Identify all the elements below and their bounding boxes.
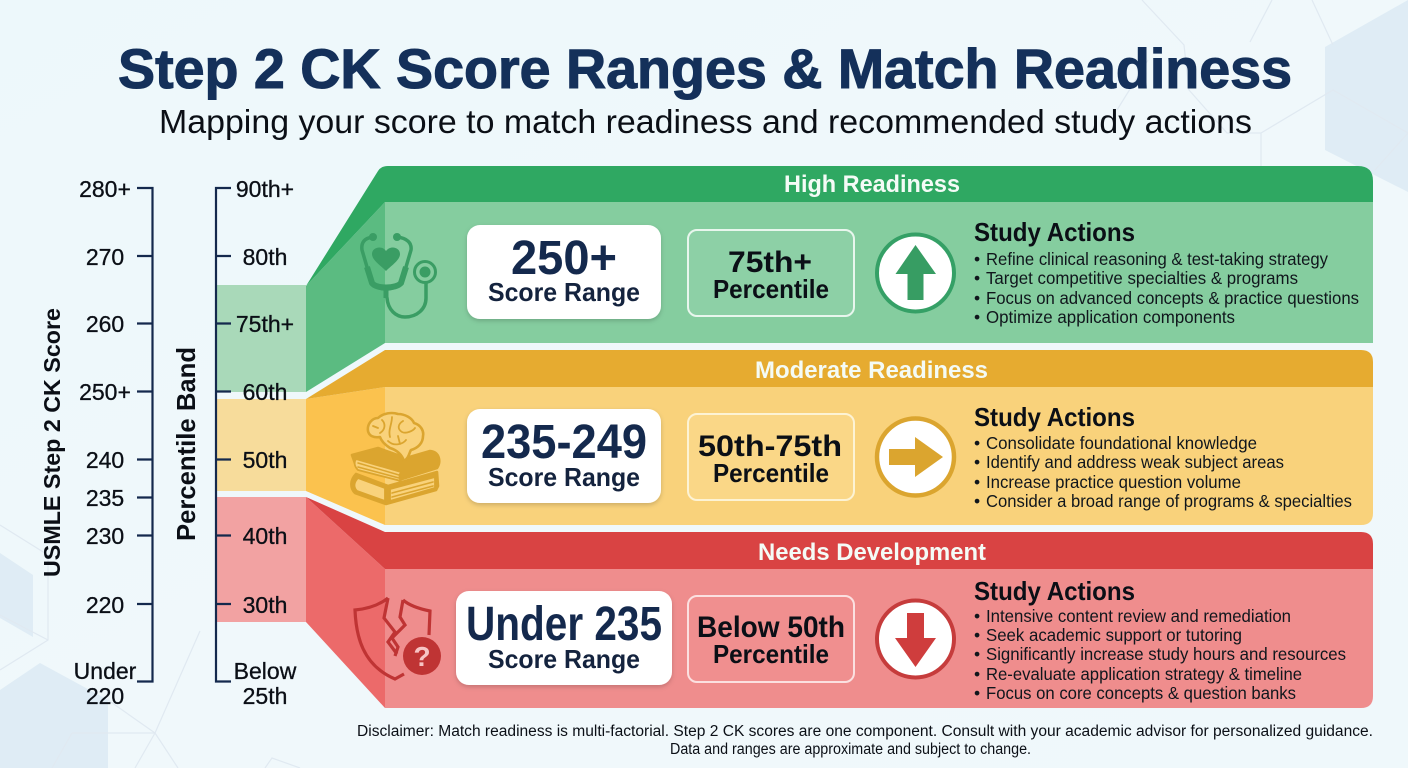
axis: USMLE Step 2 CK score: 235 xyxy=(86,485,124,511)
disclaimer: Disclaimer: Match readiness is multi-factorial. Step 2 CK scores are one component. Consult with your academic advisor for personalized guidance. xyxy=(357,723,1373,740)
percentile card: 75th+: 75th+ xyxy=(728,246,812,279)
panel: high readiness xyxy=(306,166,1373,392)
axis title: USMLE Step 2 CK Score: USMLE Step 2 CK Score xyxy=(39,308,65,577)
axis: USMLE Step 2 CK score: 240 xyxy=(86,447,124,473)
score card: Under 235: Under 235 xyxy=(466,598,662,651)
study actions: moderate readiness: Study Actions xyxy=(974,402,1135,432)
axis: USMLE Step 2 CK score: 260 xyxy=(86,311,124,337)
axis: USMLE Step 2 CK score xyxy=(74,176,152,709)
yellow side face xyxy=(306,387,385,525)
score card: 250+: Score Range xyxy=(488,277,640,307)
study actions: high readiness: Optimize application components xyxy=(986,307,1235,327)
study actions: high readiness xyxy=(974,217,1359,327)
study actions: moderate readiness: • xyxy=(974,472,980,492)
study actions: needs development xyxy=(974,576,1346,703)
percentile card: 50th-75th: 50th-75th xyxy=(698,430,842,463)
percentile card: 50th-75th xyxy=(688,414,854,500)
icon: down arrow xyxy=(877,600,954,678)
axis: USMLE Step 2 CK score: 220 xyxy=(86,592,124,618)
study actions: needs development: Focus on core concepts & question banks xyxy=(986,683,1296,703)
percentile card: 50th-75th: Percentile xyxy=(713,458,829,488)
green side face xyxy=(306,202,385,392)
score card: Under 235 xyxy=(456,591,672,685)
study actions: moderate readiness: Increase practice question volume xyxy=(986,472,1241,492)
red panel body xyxy=(385,569,1373,708)
study actions: moderate readiness: Identify and address weak subject areas xyxy=(986,452,1284,472)
study actions: moderate readiness: • xyxy=(974,452,980,472)
bottom book xyxy=(351,472,438,504)
axis: percentile: 50th xyxy=(243,447,287,473)
axis: percentile: 60th xyxy=(243,379,287,405)
panel: needs development xyxy=(306,497,1373,708)
axis: percentile: Below xyxy=(234,658,297,684)
axis: USMLE Step 2 CK score: 280+ xyxy=(79,176,131,202)
percentile band: needs development xyxy=(216,497,306,622)
red side face xyxy=(306,497,385,708)
axis: percentile: 80th xyxy=(243,244,287,270)
icon: right arrow xyxy=(877,418,954,496)
header: Needs Development: Needs Development xyxy=(758,539,986,566)
axis: percentile: 75th+ xyxy=(236,311,294,337)
study actions: moderate readiness: Consolidate foundational knowledge xyxy=(986,433,1257,453)
red header band xyxy=(306,497,1373,569)
study actions: moderate readiness: Consider a broad range of programs & specialties xyxy=(986,491,1352,511)
icon: up arrow xyxy=(877,234,954,312)
percentile band: moderate xyxy=(216,399,306,491)
score card: 235-249: Score Range xyxy=(488,462,640,492)
study actions: needs development: • xyxy=(974,606,980,626)
brain xyxy=(368,413,423,461)
axis: USMLE Step 2 CK score: 230 xyxy=(86,523,124,549)
axis: USMLE Step 2 CK score: Under xyxy=(74,658,137,684)
axis: percentile: 25th xyxy=(243,683,287,709)
score card: 235-249 xyxy=(467,409,661,503)
disclaimer xyxy=(357,723,1373,758)
study actions: moderate readiness: • xyxy=(974,491,980,511)
score card: Under 235: Score Range xyxy=(488,644,640,674)
study actions: high readiness: Study Actions xyxy=(974,217,1135,247)
study actions: needs development: • xyxy=(974,683,980,703)
score card: 250+ xyxy=(467,225,661,319)
axis: percentile xyxy=(216,176,297,709)
title: Step 2 CK Score Ranges & Match Readiness xyxy=(118,37,1292,100)
panel: moderate readiness xyxy=(306,350,1373,525)
yellow panel body xyxy=(385,387,1373,525)
study actions: needs development: • xyxy=(974,664,980,684)
axis: USMLE Step 2 CK score: 270 xyxy=(86,244,124,270)
study actions: high readiness: • xyxy=(974,268,980,288)
study actions: high readiness: • xyxy=(974,307,980,327)
percentile card: Below 50th: Percentile xyxy=(713,639,829,669)
study actions: high readiness: • xyxy=(974,249,980,269)
study actions: needs development: • xyxy=(974,625,980,645)
study actions: high readiness: Target competitive specialties & programs xyxy=(986,268,1298,288)
axis: USMLE Step 2 CK score: 220 xyxy=(86,683,124,709)
study actions: needs development: Re-evaluate application strategy & timeline xyxy=(986,664,1302,684)
percentile card: 75th+ xyxy=(688,230,854,316)
axis: percentile: 40th xyxy=(243,523,287,549)
study actions: needs development: Study Actions xyxy=(974,576,1135,606)
subtitle: Mapping your score to match readiness and recommended study actions xyxy=(159,103,1252,140)
score card: 235-249: 235-249 xyxy=(481,416,647,469)
study actions: needs development: Significantly increase study hours and resources xyxy=(986,644,1346,664)
study actions: needs development: • xyxy=(974,644,980,664)
axis: USMLE Step 2 CK score: 250+ xyxy=(79,379,131,405)
study actions: high readiness: Focus on advanced concepts & practice questions xyxy=(986,288,1359,308)
icon: broken shield with question mark: ? xyxy=(413,641,431,672)
percentile card: Below 50th: Below 50th xyxy=(697,611,845,644)
header: High Readiness: High Readiness xyxy=(784,171,960,198)
icon: broken shield with question mark xyxy=(355,598,441,679)
axis: percentile: 90th+ xyxy=(236,176,294,202)
study actions: needs development: Intensive content review and remediation xyxy=(986,606,1291,626)
study actions: high readiness: • xyxy=(974,288,980,308)
study actions: moderate readiness: • xyxy=(974,433,980,453)
study actions: high readiness: Refine clinical reasoning & test-taking strategy xyxy=(986,249,1328,269)
axis: percentile: 30th xyxy=(243,592,287,618)
percentile card: Below 50th xyxy=(688,596,854,682)
study actions: needs development: Seek academic support or tutoring xyxy=(986,625,1242,645)
green header band xyxy=(306,166,1373,286)
icon: brain on books xyxy=(351,413,439,504)
study actions: moderate readiness xyxy=(974,402,1352,511)
disclaimer: Data and ranges are approximate and subject to change. xyxy=(670,741,1031,758)
yellow header band xyxy=(306,350,1373,399)
header: Moderate Readiness: Moderate Readiness xyxy=(755,357,988,384)
green panel body xyxy=(385,202,1373,343)
top book xyxy=(352,448,439,479)
percentile card: 75th+: Percentile xyxy=(713,274,829,304)
percentile band: high xyxy=(216,285,306,392)
axis title: Percentile Band: Percentile Band xyxy=(171,347,201,541)
icon: stethoscope with heart xyxy=(362,233,436,317)
score card: 250+: 250+ xyxy=(511,232,617,285)
